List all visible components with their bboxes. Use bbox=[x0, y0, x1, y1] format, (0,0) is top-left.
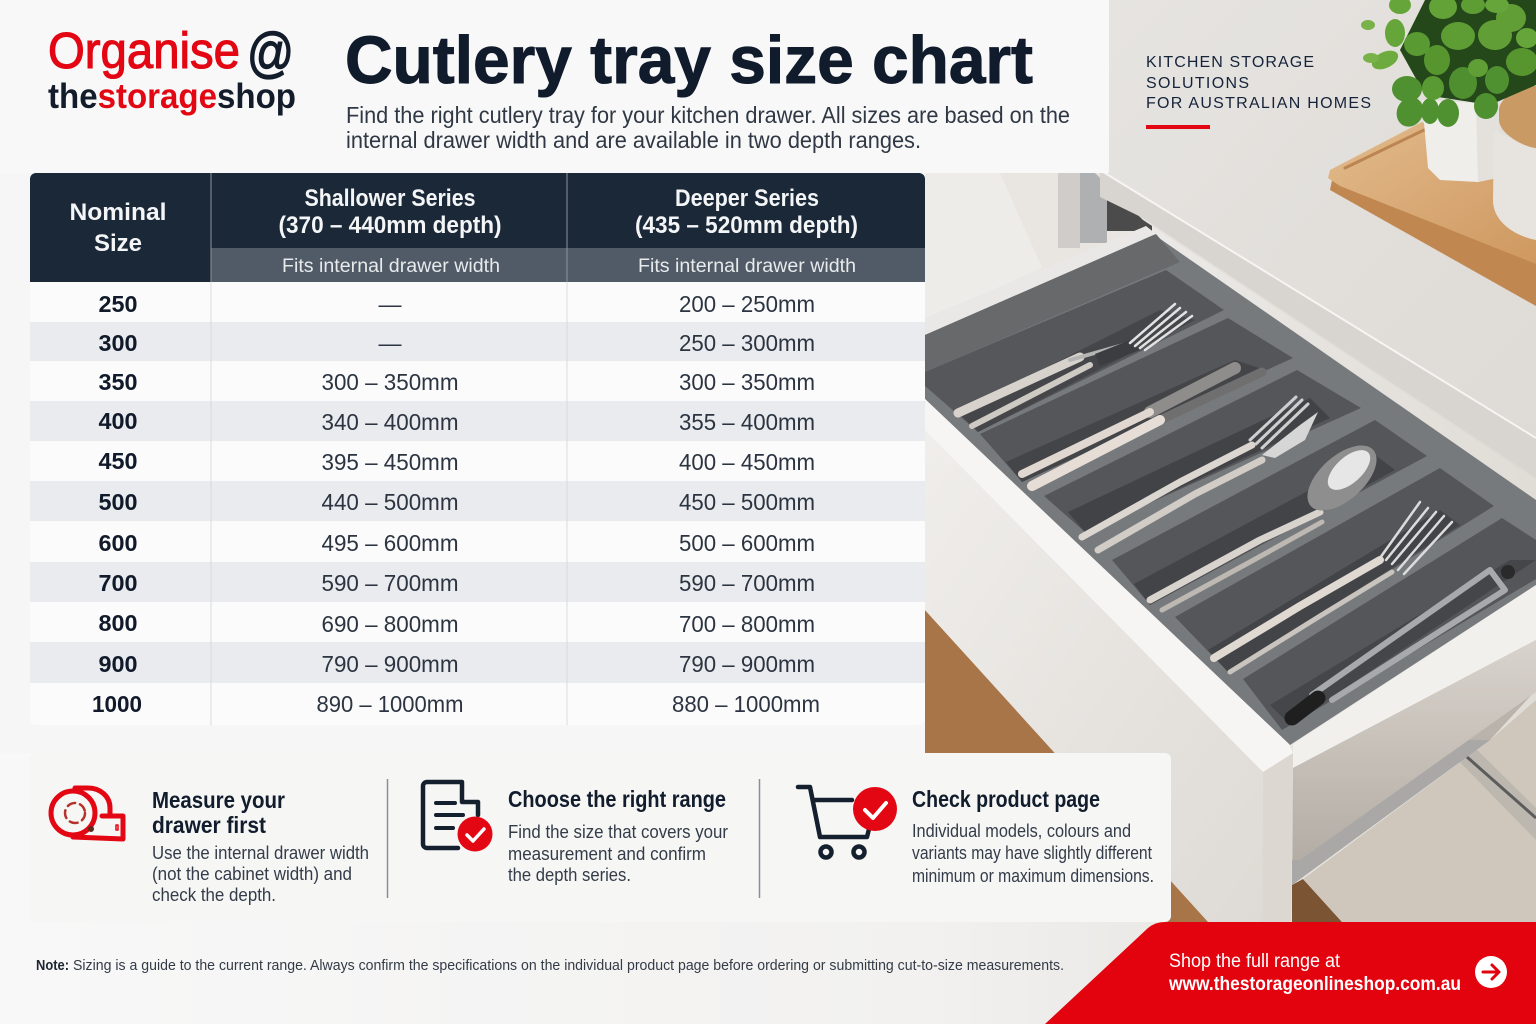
table header bbox=[30, 173, 925, 282]
forks bbox=[958, 304, 1192, 426]
tip 2 text: the depth series. bbox=[508, 865, 631, 885]
table rows bbox=[30, 282, 925, 725]
icon: tape measure bbox=[51, 788, 123, 839]
tip 1 text: Use the internal drawer width bbox=[152, 843, 369, 863]
drawer white rims bbox=[925, 399, 1536, 860]
tip 2 text bbox=[508, 786, 728, 885]
row 900: 900 bbox=[98, 651, 138, 677]
tip 2 text: Find the size that covers your bbox=[508, 822, 728, 842]
row 450: 400 – 450mm bbox=[679, 449, 815, 475]
row 500: 440 – 500mm bbox=[322, 489, 458, 515]
row 250: 200 – 250mm bbox=[679, 291, 815, 317]
row 500: 500 bbox=[98, 489, 138, 515]
canister bbox=[1493, 86, 1536, 240]
row 1000: 890 – 1000mm bbox=[316, 691, 464, 717]
spoon bbox=[1150, 434, 1388, 610]
row 1000: 880 – 1000mm bbox=[672, 691, 820, 717]
table header: (370 – 440mm depth) bbox=[278, 212, 502, 239]
tagline: FOR AUSTRALIAN HOMES bbox=[1146, 95, 1371, 112]
row 500: 450 – 500mm bbox=[679, 489, 815, 515]
logo: thestorageshop bbox=[48, 77, 296, 116]
tagline: SOLUTIONS bbox=[1146, 75, 1249, 92]
row 400: 340 – 400mm bbox=[322, 409, 458, 435]
lower cabinet door bbox=[1303, 700, 1536, 922]
footer note: Note: bbox=[36, 958, 69, 974]
kitchen photo bbox=[925, 0, 1536, 922]
row 400: 400 bbox=[98, 408, 138, 434]
row 450 bbox=[98, 448, 815, 475]
plant pot bbox=[1422, 100, 1500, 182]
row 900: 790 – 900mm bbox=[679, 651, 815, 677]
tip 1 text bbox=[152, 787, 369, 905]
drawer front and side bbox=[925, 430, 1536, 922]
table header: Fits internal drawer width bbox=[282, 256, 500, 277]
row 900: 790 – 900mm bbox=[322, 651, 458, 677]
lower left background strip bbox=[0, 719, 925, 753]
row 350 bbox=[98, 369, 815, 395]
row 250 bbox=[98, 291, 815, 317]
row 450: 450 bbox=[98, 448, 138, 474]
left background panel bbox=[0, 173, 925, 753]
cutlery tray bbox=[925, 226, 1536, 860]
tip 1 text: (not the cabinet width) and bbox=[152, 864, 352, 884]
tip 2 text: measurement and confirm bbox=[508, 844, 706, 864]
compartment 1 bbox=[925, 270, 1224, 432]
size table bbox=[30, 173, 925, 725]
row 800: 800 bbox=[98, 610, 138, 636]
row 700: 590 – 700mm bbox=[322, 570, 458, 596]
wooden board bbox=[1328, 122, 1536, 306]
compartment 5 bbox=[1175, 468, 1494, 672]
row 250: — bbox=[378, 291, 402, 317]
forks in compartment 5 bbox=[1214, 502, 1452, 672]
row 350: 300 – 350mm bbox=[679, 369, 815, 395]
row 500 bbox=[98, 489, 815, 515]
subtitle: Find the right cutlery tray for your kitchen drawer. All sizes are based on the bbox=[346, 102, 1070, 128]
row 300: 250 – 300mm bbox=[679, 330, 815, 356]
tip 1 text: Measure your bbox=[152, 787, 285, 813]
row 800: 700 – 800mm bbox=[679, 611, 815, 637]
row 700 bbox=[98, 570, 815, 596]
row 700: 700 bbox=[98, 570, 138, 596]
footer note: Sizing is a guide to the current range. Always confirm the specifications on the individual product page before ordering or submitting cut-to-size measurements. bbox=[73, 958, 1064, 974]
row 600: 600 bbox=[98, 530, 138, 556]
row 800: 690 – 800mm bbox=[322, 611, 458, 637]
green plant bbox=[1361, 0, 1536, 131]
compartment 3 bbox=[1044, 370, 1361, 532]
countertop bbox=[1095, 0, 1536, 480]
tip 1 text: drawer first bbox=[152, 812, 266, 838]
row 450: 395 – 450mm bbox=[322, 449, 458, 475]
row 700: 590 – 700mm bbox=[679, 570, 815, 596]
call to action banner bbox=[1045, 922, 1536, 1024]
tip 3 text: minimum or maximum dimensions. bbox=[912, 866, 1154, 886]
row 350: 350 bbox=[98, 369, 138, 395]
row 300: 300 bbox=[98, 330, 138, 356]
subtitle: internal drawer width and are available in two depth ranges. bbox=[346, 127, 921, 153]
row 600: 500 – 600mm bbox=[679, 530, 815, 556]
tagline bbox=[1146, 54, 1371, 129]
tagline: KITCHEN STORAGE bbox=[1146, 54, 1314, 71]
call to action banner: www.thestorageonlineshop.com.au bbox=[1168, 974, 1461, 995]
tip 2 text: Choose the right range bbox=[508, 786, 726, 812]
table header: Shallower Series bbox=[304, 185, 476, 212]
wood floor sections bbox=[925, 610, 1342, 922]
table header: Fits internal drawer width bbox=[638, 256, 856, 277]
table header: Size bbox=[94, 230, 142, 257]
icon: document with check bbox=[423, 782, 492, 852]
logo: Organise bbox=[48, 22, 240, 79]
icon: arrow button bbox=[1475, 956, 1507, 988]
row 800 bbox=[98, 610, 815, 637]
row 1000 bbox=[92, 691, 820, 717]
tip 3 text bbox=[912, 786, 1154, 886]
table header: Deeper Series bbox=[675, 185, 819, 212]
row 300 bbox=[98, 330, 815, 356]
row 250: 250 bbox=[98, 291, 138, 317]
row 350: 300 – 350mm bbox=[322, 369, 458, 395]
knives bbox=[1022, 368, 1262, 486]
row 900 bbox=[98, 651, 815, 677]
title: Cutlery tray size chart bbox=[345, 23, 1033, 98]
subtitle bbox=[346, 102, 1070, 153]
tongs bbox=[1292, 565, 1515, 718]
cabinet behind drawer bbox=[925, 173, 1152, 343]
icon: cart with check bbox=[798, 787, 897, 858]
row 600: 495 – 600mm bbox=[322, 530, 458, 556]
tip 3 text: Individual models, colours and bbox=[912, 821, 1131, 841]
row 300: — bbox=[378, 330, 402, 356]
table header: Nominal bbox=[70, 199, 166, 226]
tip 1 text: check the depth. bbox=[152, 885, 276, 905]
call to action banner: Shop the full range at bbox=[1169, 951, 1341, 972]
row 400: 355 – 400mm bbox=[679, 409, 815, 435]
row 600 bbox=[98, 530, 815, 556]
row 400 bbox=[98, 408, 815, 435]
table header: (435 – 520mm depth) bbox=[635, 212, 858, 239]
logo bbox=[48, 21, 296, 116]
tip 3 text: Check product page bbox=[912, 786, 1100, 812]
forks and spoon in compartment 3 bbox=[1082, 397, 1318, 550]
row 1000: 1000 bbox=[92, 691, 142, 717]
compartment 4 bbox=[1112, 420, 1427, 605]
compartment 6 bbox=[1243, 518, 1536, 730]
logo: @ bbox=[247, 21, 294, 83]
tip 3 text: variants may have slightly different bbox=[912, 843, 1152, 863]
header panel bbox=[0, 0, 1109, 173]
tips panel bbox=[30, 753, 1171, 922]
compartment 2 bbox=[980, 318, 1293, 482]
